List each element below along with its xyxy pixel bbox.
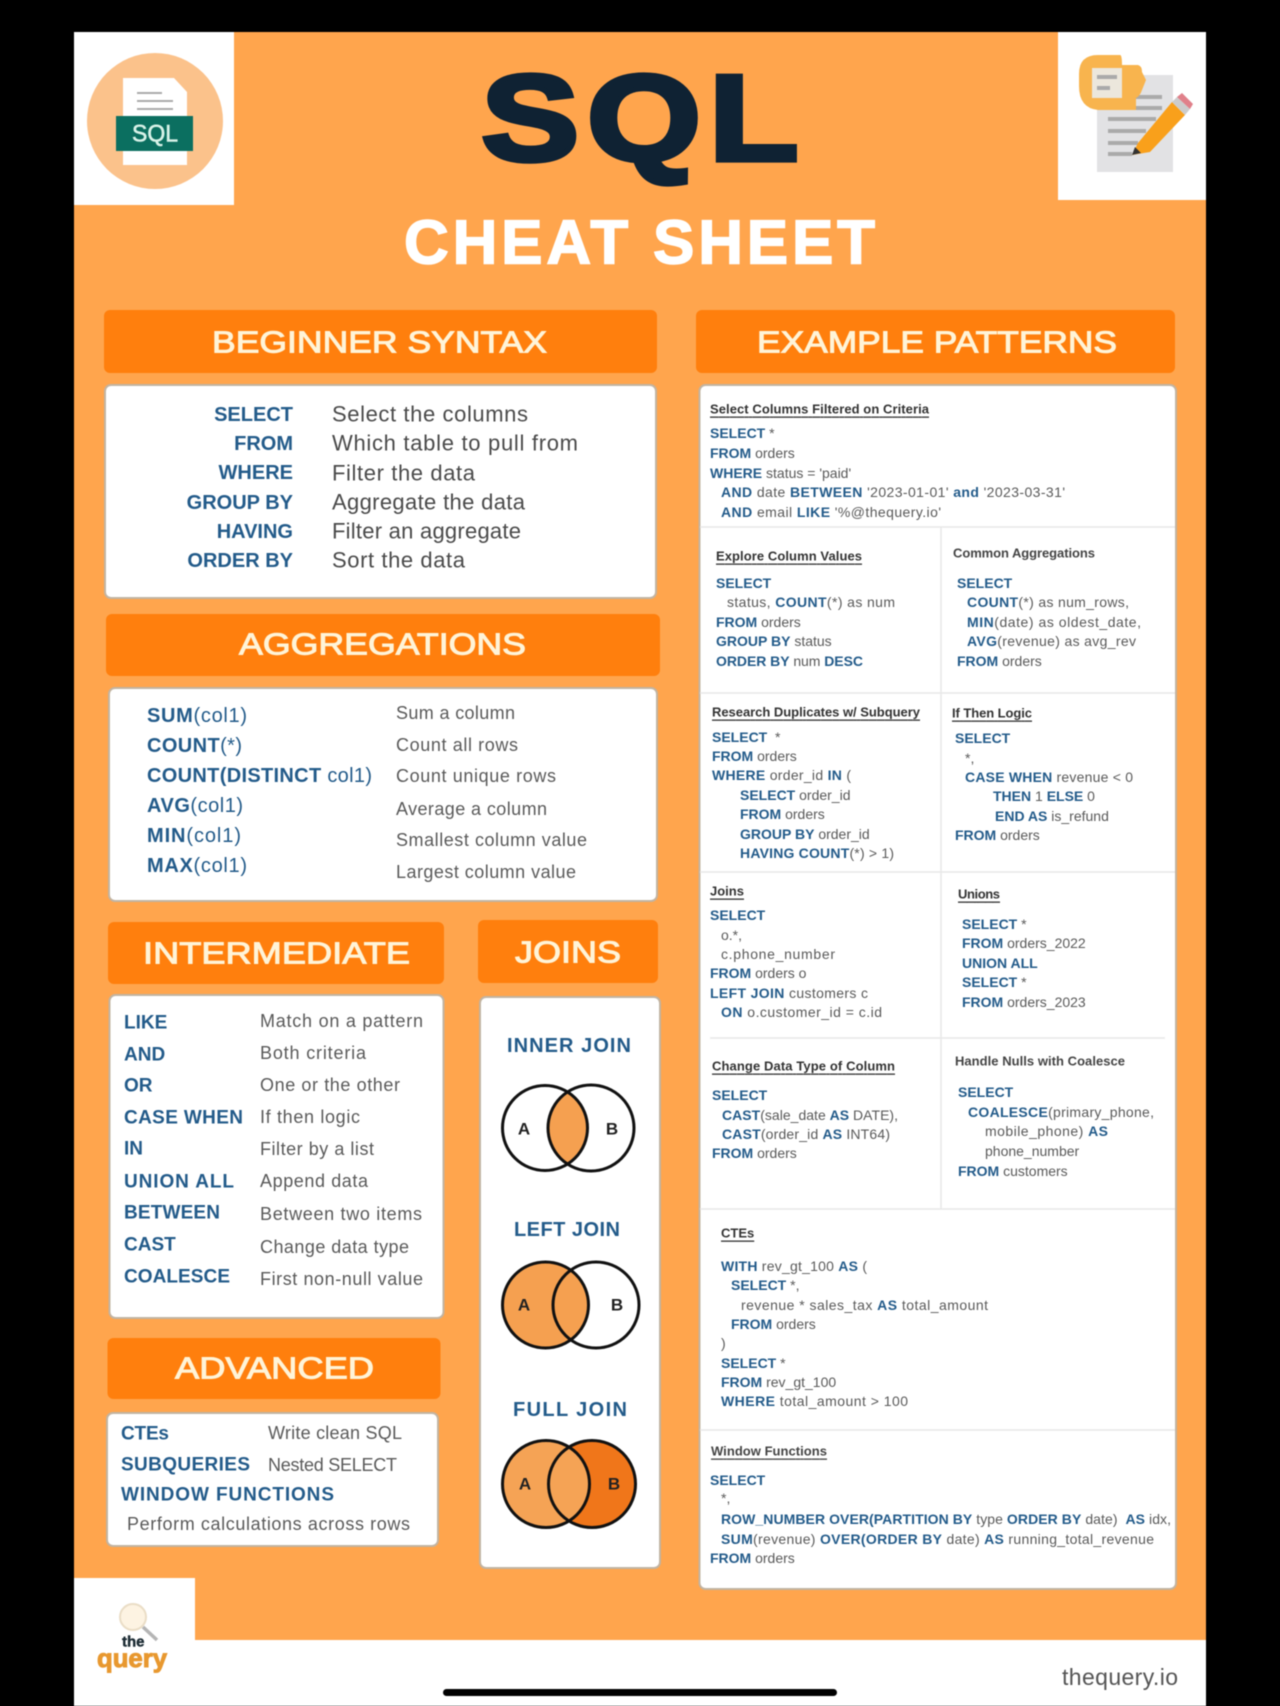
pattern: common aggregations: Common Aggregations [953,546,1095,560]
panel: Aggregations: AVG(col1) [147,795,243,817]
panel: Intermediate: AND [124,1044,165,1066]
panel: Joins [480,997,660,1568]
pattern: CTEs [721,1226,988,1409]
pattern: CTEs: SELECT * [721,1355,786,1371]
panel: Beginner Syntax: SELECT [214,404,293,426]
pattern: if then logic: *, [965,750,974,766]
panel: Joins: INNER JOIN [507,1035,631,1057]
pattern: window functions: ROW_NUMBER OVER(PARTITION BY type ORDER BY date) AS idx, [721,1511,1171,1527]
panel: Intermediate: Between two items [260,1204,422,1224]
panel: Aggregations [109,688,657,901]
pattern: change data type: FROM orders [712,1145,797,1161]
pattern: handle nulls: phone_number [985,1143,1080,1159]
pattern: joins: ON o.customer_id = c.id [721,1004,882,1020]
pattern: explore column values [716,548,895,669]
panel: Aggregations: Count all rows [396,735,518,755]
pattern: research duplicates: HAVING COUNT(*) > 1) [740,845,894,861]
pattern: change data type: Change Data Type of Column [712,1058,895,1074]
pattern: common aggregations: COUNT(*) as num_rows, [967,594,1129,610]
diagram: left join venn [502,1262,639,1348]
phone home indicator [443,1689,837,1696]
pattern: explore column values: FROM orders [716,614,801,630]
panel: Intermediate [110,995,444,1318]
panel: Beginner Syntax: GROUP BY [187,492,294,514]
pattern: common aggregations: FROM orders [957,653,1042,669]
heading: Example Patterns [696,310,1175,373]
panel: Intermediate: One or the other [260,1075,400,1095]
logo: the query [97,1604,168,1673]
heading: Aggregations [106,614,660,676]
pattern: common aggregations: MIN(date) as oldest_date, [967,614,1141,630]
pattern: CTEs: FROM rev_gt_100 [721,1374,836,1390]
heading: Joins [478,920,658,983]
heading: Advanced: ADVANCED [175,1350,374,1386]
pattern: change data type [712,1058,898,1161]
pattern: if then logic: If Then Logic [952,706,1032,720]
pattern: handle nulls [955,1054,1154,1179]
pattern: research duplicates: FROM orders [740,806,825,822]
panel: Intermediate: CAST [124,1234,176,1256]
panel: Beginner Syntax: WHERE [219,462,293,484]
panel: Intermediate: CASE WHEN [124,1108,243,1128]
pattern: select columns filtered: Select Columns Filtered on Criteria [710,402,930,416]
pattern: unions: Unions [958,886,1000,902]
pattern: window functions: SUM(revenue) OVER(ORDER BY date) AS running_total_revenue [721,1531,1154,1547]
diagram: left join venn: B [611,1296,623,1314]
pattern: window functions [710,1444,1171,1566]
pattern: window functions: SELECT [710,1472,766,1488]
pattern: if then logic [952,706,1133,843]
pattern: change data type: CAST(order_id AS INT64) [722,1126,890,1142]
heading: Advanced [108,1338,440,1399]
diagram: full join venn [502,1440,636,1528]
heading: Intermediate [108,922,444,984]
diagram: full join venn: A [519,1474,531,1494]
panel: Intermediate: OR [124,1076,153,1096]
pattern: common aggregations: SELECT [957,575,1013,591]
pattern: window functions: *, [721,1490,730,1506]
panel: Aggregations: MIN(col1) [147,825,241,847]
pattern: unions: UNION ALL [962,955,1038,971]
pattern: CTEs: WHERE total_amount > 100 [721,1393,908,1409]
pattern: unions: SELECT * [962,974,1027,990]
pattern: joins: SELECT [710,907,766,923]
diagram: full join venn: B [608,1474,620,1494]
panel: Beginner Syntax: Which table to pull from [332,430,578,456]
pattern: explore column values: Explore Column Values [716,548,862,564]
heading: Intermediate: INTERMEDIATE [143,936,410,970]
panel: Aggregations: Average a column [396,799,547,819]
pattern: research duplicates: FROM orders [712,748,797,764]
pattern: common aggregations [953,546,1141,669]
pattern: research duplicates: SELECT * [712,729,781,745]
panel: Intermediate: First non-null value [260,1269,423,1289]
heading: Beginner Syntax [104,310,657,373]
heading: Aggregations: AGGREGATIONS [239,626,526,662]
panel: Joins: FULL JOIN [513,1399,627,1421]
pattern: handle nulls: Handle Nulls with Coalesce [955,1054,1125,1068]
panel: Beginner Syntax: Select the columns [332,402,528,426]
pattern: select columns filtered: FROM orders [710,445,795,461]
panel: Intermediate: COALESCE [124,1266,230,1288]
panel: Beginner Syntax: Aggregate the data [332,490,526,514]
panel: Aggregations: Largest column value [396,862,576,882]
panel: Advanced: SUBQUERIES [121,1454,250,1476]
pattern: CTEs: FROM orders [731,1316,816,1332]
pattern: unions: SELECT * [962,916,1027,932]
logo: the query: query [97,1643,168,1673]
pattern: handle nulls: SELECT [958,1084,1014,1100]
pattern: joins: Joins [710,884,744,898]
pattern: handle nulls: mobile_phone) AS [985,1123,1108,1139]
heading: Beginner Syntax: BEGINNER SYNTAX [212,324,547,360]
panel: Intermediate: Append data [260,1171,369,1191]
panel: Advanced: WINDOW FUNCTIONS [121,1484,334,1506]
panel: Advanced: Perform calculations across rows [127,1514,410,1534]
pattern: change data type: SELECT [712,1087,768,1103]
pattern: select columns filtered: WHERE status = 'paid' [710,465,851,481]
pattern: handle nulls: FROM customers [958,1163,1068,1179]
panel: Beginner Syntax: Filter an aggregate [332,518,521,544]
panel: Intermediate: Both criteria [260,1043,367,1063]
pattern: unions [958,886,1086,1010]
panel: Joins: LEFT JOIN [514,1219,620,1241]
panel: Advanced [107,1413,438,1546]
icon: SQL file logo: SQL [132,120,178,148]
panel: Beginner Syntax: Sort the data [332,548,466,572]
pattern: common aggregations: AVG(revenue) as avg_rev [967,633,1136,649]
panel: Intermediate: Filter by a list [260,1139,374,1159]
panel: Aggregations: SUM(col1) [147,705,247,727]
heading: Example Patterns: EXAMPLE PATTERNS [757,324,1117,360]
panel: Intermediate: BETWEEN [124,1202,220,1224]
panel: Intermediate: Change data type [260,1237,409,1257]
heading: Joins: JOINS [515,934,621,970]
pattern: joins: o.*, [721,927,742,943]
icon: document and pencil [1058,32,1206,200]
pattern: if then logic: SELECT [955,730,1011,746]
pattern: CTEs: WITH rev_gt_100 AS ( [721,1258,867,1274]
panel: Advanced: Nested SELECT [268,1455,397,1475]
panel: Intermediate: UNION ALL [124,1172,234,1192]
panel: Beginner Syntax [105,385,656,598]
pattern: joins [710,884,882,1020]
diagram: left join venn: A [518,1296,530,1314]
panel: Beginner Syntax: FROM [234,433,293,455]
panel: Aggregations: Sum a column [396,703,515,723]
diagram: inner join venn: B [606,1120,618,1138]
panel: Intermediate: IN [124,1138,143,1160]
pattern: explore column values: SELECT [716,575,772,591]
diagram: inner join venn: A [518,1120,530,1138]
subtitle: CHEAT SHEET: CHEAT SHEET [404,208,875,278]
pattern: explore column values: status, COUNT(*) as num [727,594,895,610]
pattern: window functions: Window Functions [711,1444,827,1458]
panel: Example Patterns [700,385,1176,1589]
website label: thequery.io [1062,1664,1178,1690]
pattern: research duplicates: GROUP BY order_id [740,826,870,842]
pattern: research duplicates [712,704,921,861]
panel: Intermediate: Match on a pattern [260,1011,423,1031]
pattern: window functions: FROM orders [710,1550,795,1566]
pattern: unions: FROM orders_2023 [962,994,1086,1010]
panel: Beginner Syntax: HAVING [217,521,293,543]
pattern: CTEs: ) [721,1335,726,1351]
pattern: unions: FROM orders_2022 [962,935,1086,951]
diagram: inner join venn [502,1085,634,1171]
pattern: select columns filtered: AND email LIKE '%@thequery.io' [721,504,941,520]
title: SQL: SQL [481,50,806,186]
pattern: research duplicates: SELECT order_id [740,787,850,803]
panel: Advanced: Write clean SQL [268,1423,402,1443]
pattern: joins: c.phone_number [721,946,835,962]
pattern: CTEs: CTEs [721,1226,754,1240]
panel: Advanced: CTEs [121,1424,169,1444]
pattern: if then logic: CASE WHEN revenue < 0 [965,769,1133,785]
pattern: explore column values: ORDER BY num DESC [716,653,863,669]
panel: Aggregations: COUNT(*) [147,735,242,757]
panel: Aggregations: Smallest column value [396,830,587,850]
white footer strip [74,1578,1206,1706]
panel: Aggregations: COUNT(DISTINCT col1) [147,765,372,787]
pattern: research duplicates: WHERE order_id IN ( [712,767,851,783]
pattern: if then logic: THEN 1 ELSE 0 [993,788,1095,804]
panel: Beginner Syntax: ORDER BY [187,550,294,572]
pattern: joins: LEFT JOIN customers c [710,985,868,1001]
pattern: CTEs: revenue * sales_tax AS total_amount [741,1297,988,1313]
icon: SQL file logo [74,32,234,205]
pattern: research duplicates: Research Duplicates w/ Subquery [712,704,921,720]
pattern: explore column values: GROUP BY status [716,633,832,649]
panel: Aggregations: Count unique rows [396,766,556,786]
panel: Aggregations: MAX(col1) [147,855,247,877]
pattern: if then logic: END AS is_refund [995,808,1109,824]
panel: Beginner Syntax: Filter the data [332,460,476,486]
pattern: if then logic: FROM orders [955,827,1040,843]
logo: the query: the [122,1634,144,1650]
panel: Intermediate: If then logic [260,1107,360,1127]
pattern: change data type: CAST(sale_date AS DATE), [722,1107,898,1123]
pattern: select columns filtered: AND date BETWEEN '2023-01-01' and '2023-03-31' [721,484,1065,500]
panel: Intermediate: LIKE [124,1012,167,1034]
pattern: handle nulls: COALESCE(primary_phone, [968,1104,1154,1120]
pattern: select columns filtered [710,402,1065,520]
pattern: select columns filtered: SELECT * [710,425,775,441]
pattern: joins: FROM orders o [710,965,807,981]
pattern: CTEs: SELECT *, [731,1277,799,1293]
